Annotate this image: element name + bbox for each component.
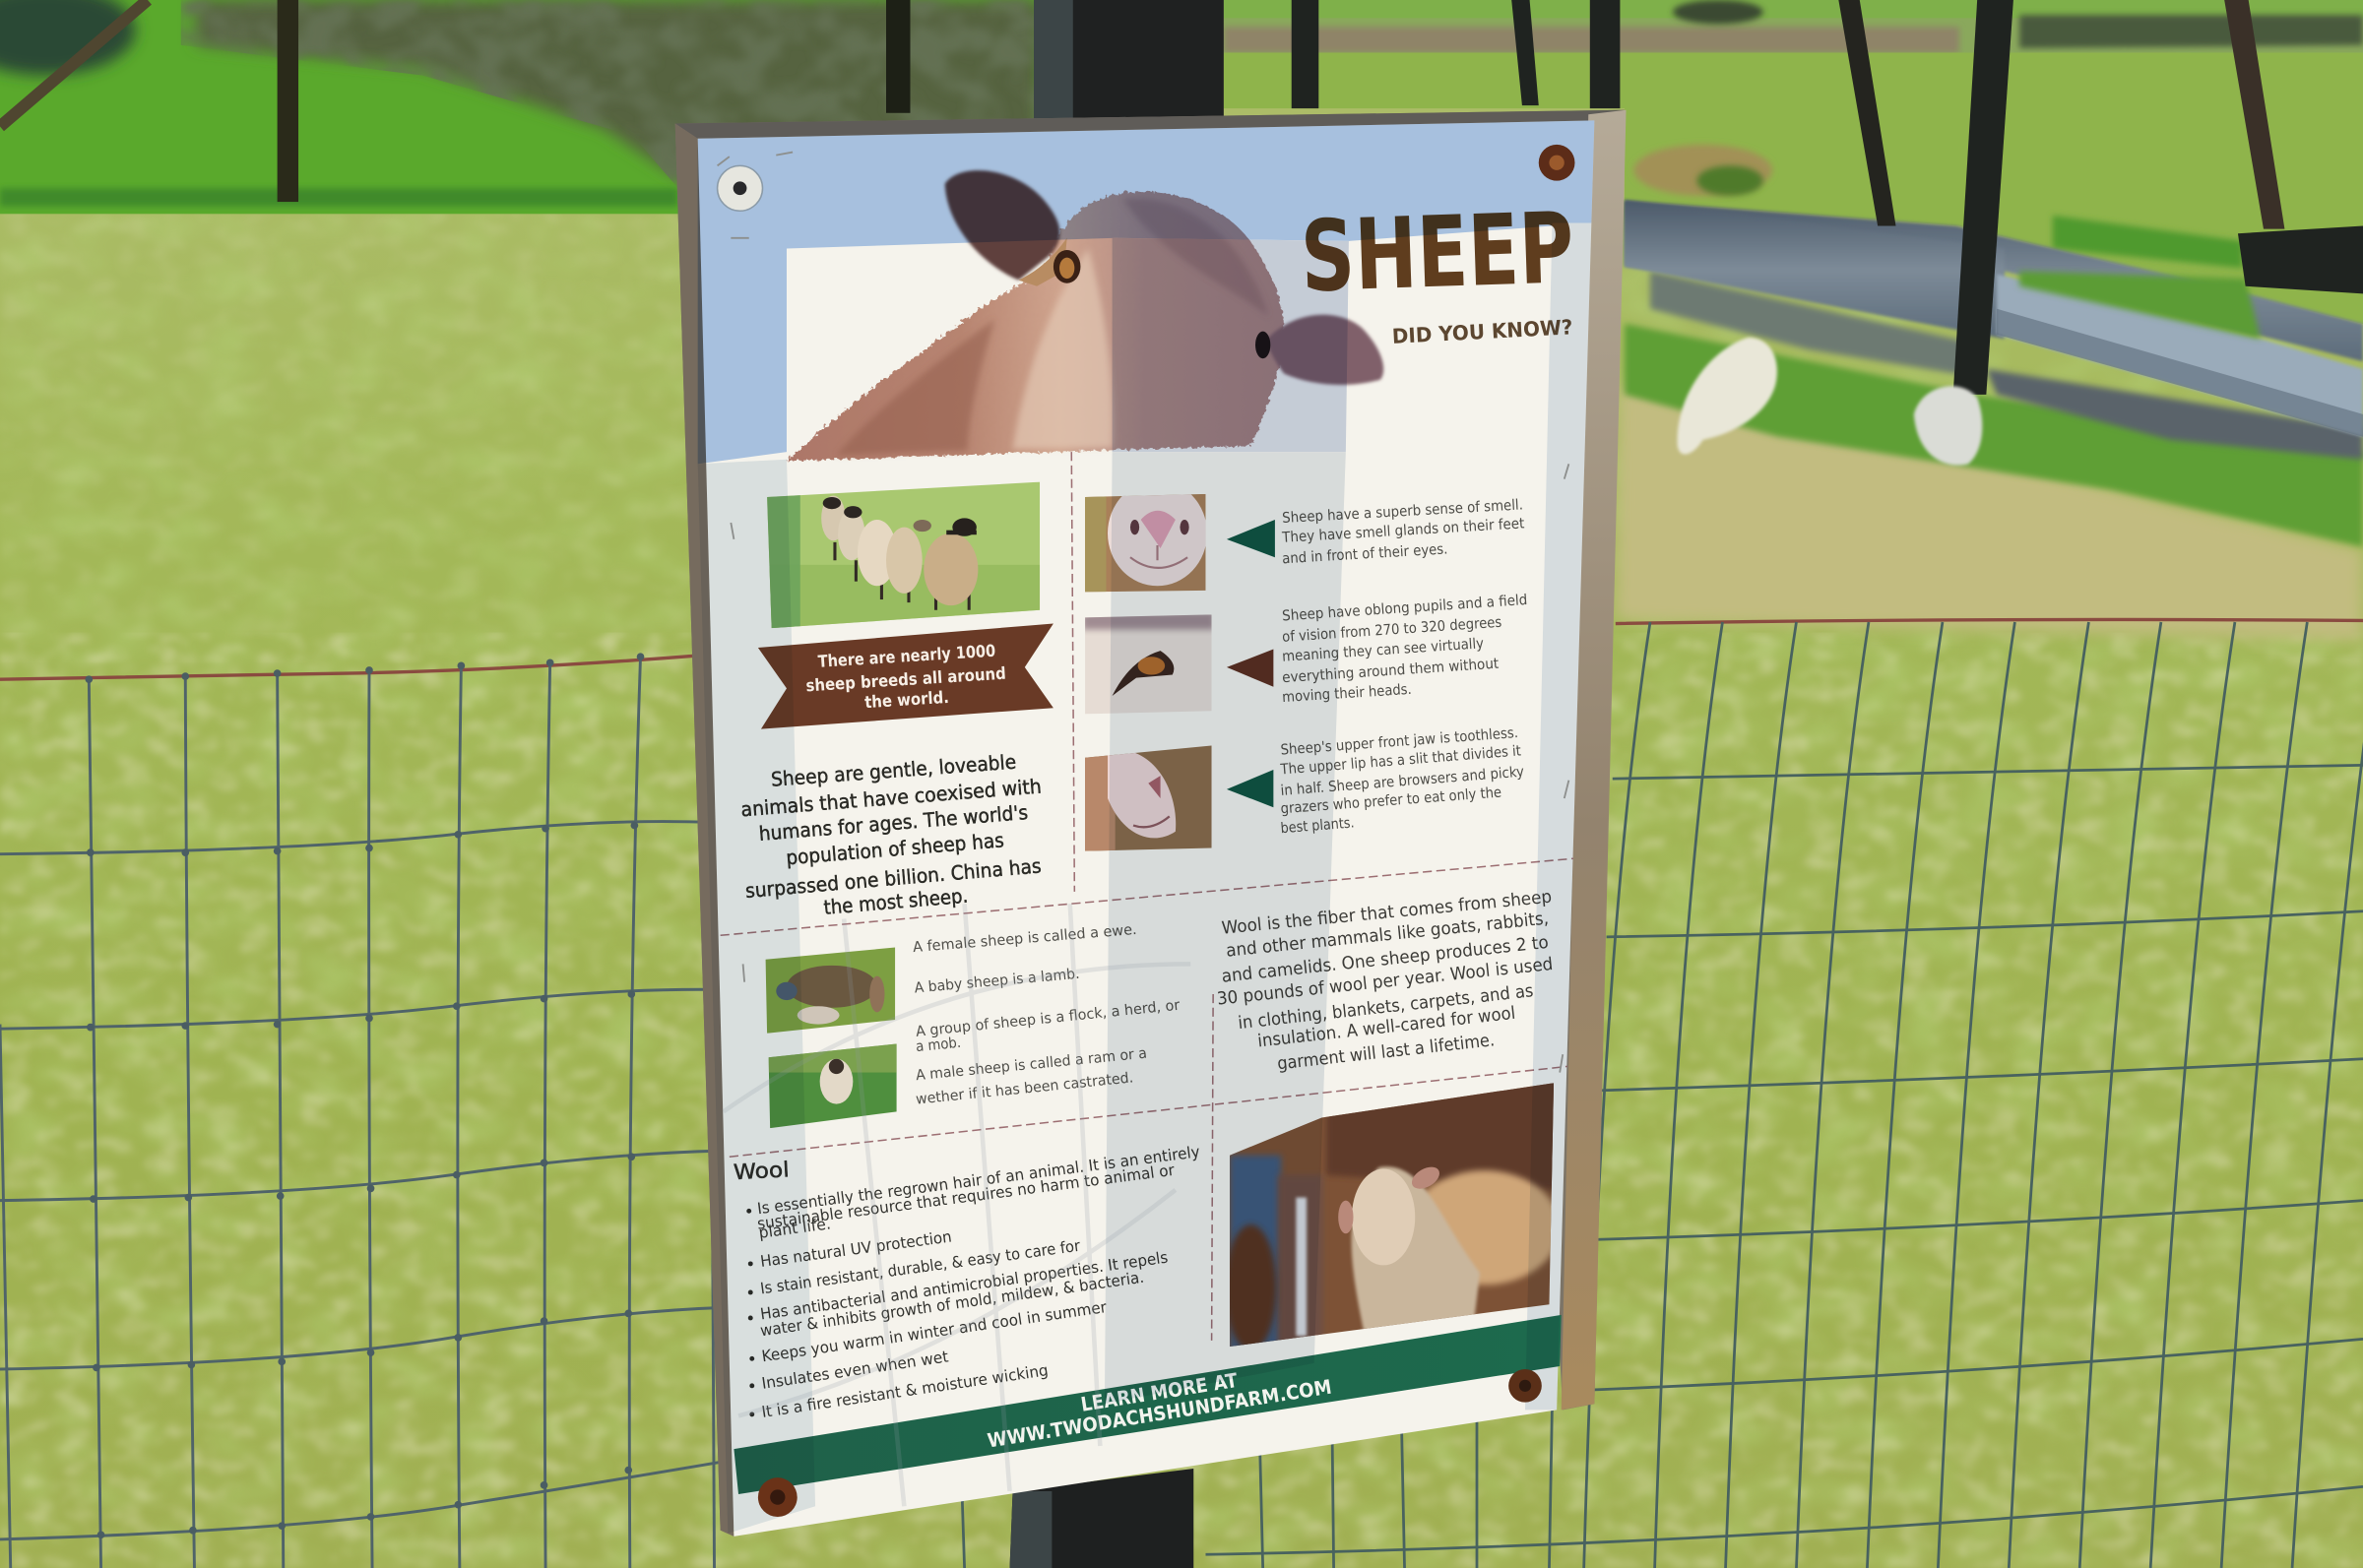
photo: sheep head [787, 170, 1383, 461]
photo: ewe and lamb [766, 947, 896, 1034]
intro paragraph: population of sheep has [786, 829, 1005, 869]
rusty screw bottom right [1508, 1369, 1542, 1403]
animal names list: A group of sheep is a flock, a herd, or [915, 997, 1182, 1040]
dashed dividers [721, 452, 1573, 1341]
animal names list [913, 921, 1182, 1108]
intro paragraph: surpassed one billion. China has [744, 854, 1043, 903]
wool paragraph: insulation. A well-cared for wool [1256, 1004, 1516, 1051]
banner: There are nearly 1000 [817, 641, 996, 671]
fact: smell: Sheep have a superb sense of smell. [1282, 496, 1523, 527]
animal names list: A female sheep is called a ewe. [913, 921, 1137, 956]
sign board [675, 110, 1627, 1537]
intro paragraph: animals that have coexised with [740, 775, 1043, 821]
fence shadow on poster [724, 904, 1190, 1506]
chicken: left [1678, 338, 1777, 455]
rusty screw top right [1539, 145, 1574, 181]
wool bullet list: Keeps you warm in winter and cool in summer [760, 1297, 1108, 1365]
fact: mouth [1279, 724, 1525, 837]
pole [1010, 0, 1224, 1568]
fact: mouth: The upper lip has a slit that divides it [1279, 742, 1522, 779]
fence right [962, 619, 2363, 1568]
fact: sight: everything around them without [1282, 656, 1500, 686]
wool bullet list: Is essentially the regrown hair of an animal. It is an entirely [756, 1142, 1201, 1218]
wool paragraph: in clothing, blankets, carpets, and as [1238, 981, 1534, 1034]
fact: mouth: grazers who prefer to eat only the [1280, 784, 1502, 817]
photo: lambs in barn [1221, 1077, 1560, 1355]
fact: sight [1282, 592, 1528, 706]
silver ground cover [1625, 201, 2363, 361]
wool bullet list: Is stain resistant, durable, & easy to care for [759, 1236, 1082, 1297]
sunlight and shadow on poster [698, 120, 1594, 1534]
wool paragraph [1216, 888, 1554, 1074]
animal names list: A male sheep is called a ram or a [915, 1045, 1148, 1084]
footer band: LEARN MORE AT [1079, 1369, 1240, 1416]
wool heading: Wool [733, 1158, 790, 1185]
wool paragraph: Wool is the fiber that comes from sheep [1221, 888, 1553, 939]
eye right [1255, 332, 1270, 358]
fact: sight: Sheep have oblong pupils and a field [1282, 592, 1528, 624]
fact: smell: and in front of their eyes. [1282, 540, 1448, 567]
title: SHEEP [1299, 192, 1575, 314]
photo: ram [768, 1043, 897, 1128]
intro paragraph: Sheep are gentle, loveable [770, 751, 1017, 791]
fact: mouth: in half. Sheep are browsers and picky [1280, 764, 1525, 799]
fact: sight: moving their heads. [1282, 681, 1412, 706]
wool bullet list: water & inhibits growth of mold, mildew, & bacteria. [759, 1268, 1145, 1340]
footer band [734, 1315, 1562, 1494]
subtitle: DID YOU KNOW? [1391, 315, 1573, 348]
washer top left [718, 165, 762, 211]
wool paragraph: and camelids. One sheep produces 2 to [1221, 933, 1550, 987]
animal names list: wether if it has been castrated. [915, 1069, 1134, 1108]
fact: sight: of vision from 270 to 320 degrees [1282, 614, 1502, 646]
poster [698, 120, 1594, 1537]
wool paragraph: 30 pounds of wool per year. Wool is used [1216, 955, 1554, 1010]
arrow: smell [1227, 520, 1275, 557]
top left trees and bright grass [0, 0, 1054, 214]
wool bullet list: Has antibacterial and antimicrobial properties. It repels [759, 1248, 1169, 1323]
wool bullet list: Has natural UV protection [759, 1227, 953, 1271]
sheep body and face [787, 192, 1284, 461]
fur shading [836, 198, 1269, 455]
dark ground [1986, 369, 2363, 460]
fact: sight: meaning they can see virtually [1282, 635, 1485, 665]
arrow: mouth [1227, 770, 1273, 807]
wool paragraph: garment will last a lifetime. [1276, 1031, 1496, 1074]
dark posts [1292, 0, 2363, 395]
sandy ground [1616, 384, 2363, 640]
photo: mouth [1082, 742, 1215, 854]
photo: eye [1085, 614, 1211, 715]
wool bullet list [746, 1142, 1201, 1421]
fact: mouth: best plants. [1280, 814, 1355, 837]
ear left [945, 170, 1059, 281]
wool bullet list: sustainable resource that requires no harm to animal or [756, 1160, 1176, 1233]
rusty screw bottom left [758, 1477, 798, 1517]
arrow: sight [1227, 650, 1273, 687]
photo: flock of sheep [761, 479, 1048, 633]
ear right [1266, 315, 1383, 385]
animal names list: A baby sheep is a lamb. [914, 966, 1080, 996]
intro paragraph: humans for ages. The world's [758, 801, 1029, 846]
footer band: WWW.TWODACHSHUNDFARM.COM [986, 1376, 1333, 1453]
fact: smell: They have smell glands on their feet [1281, 515, 1525, 546]
banner: the world. [864, 687, 949, 712]
poster sheet [698, 120, 1594, 1537]
top right field [1224, 0, 2363, 640]
fence left knots [85, 653, 644, 1538]
wool bullet list: It is a fire resistant & moisture wicking [760, 1360, 1050, 1421]
animal names list: a mob. [915, 1035, 962, 1055]
green strip [1625, 324, 2363, 546]
wool paragraph: and other mammals like goats, rabbits, [1225, 909, 1550, 962]
wool bullet list: plant life. [757, 1214, 832, 1242]
intro paragraph: the most sheep. [823, 885, 969, 919]
wool bullet list: Insulates even when wet [760, 1347, 949, 1393]
eye left [1054, 250, 1080, 283]
banner: sheep breeds all around [805, 663, 1006, 695]
photo: nose [1085, 494, 1205, 593]
fact: mouth: Sheep's upper front jaw is toothless. [1280, 724, 1519, 759]
banner [758, 624, 1054, 729]
staples [718, 153, 1568, 1073]
fence left [0, 656, 735, 1568]
chicken: right [1914, 386, 1982, 466]
intro paragraph [740, 751, 1043, 919]
fact: smell [1281, 496, 1525, 567]
